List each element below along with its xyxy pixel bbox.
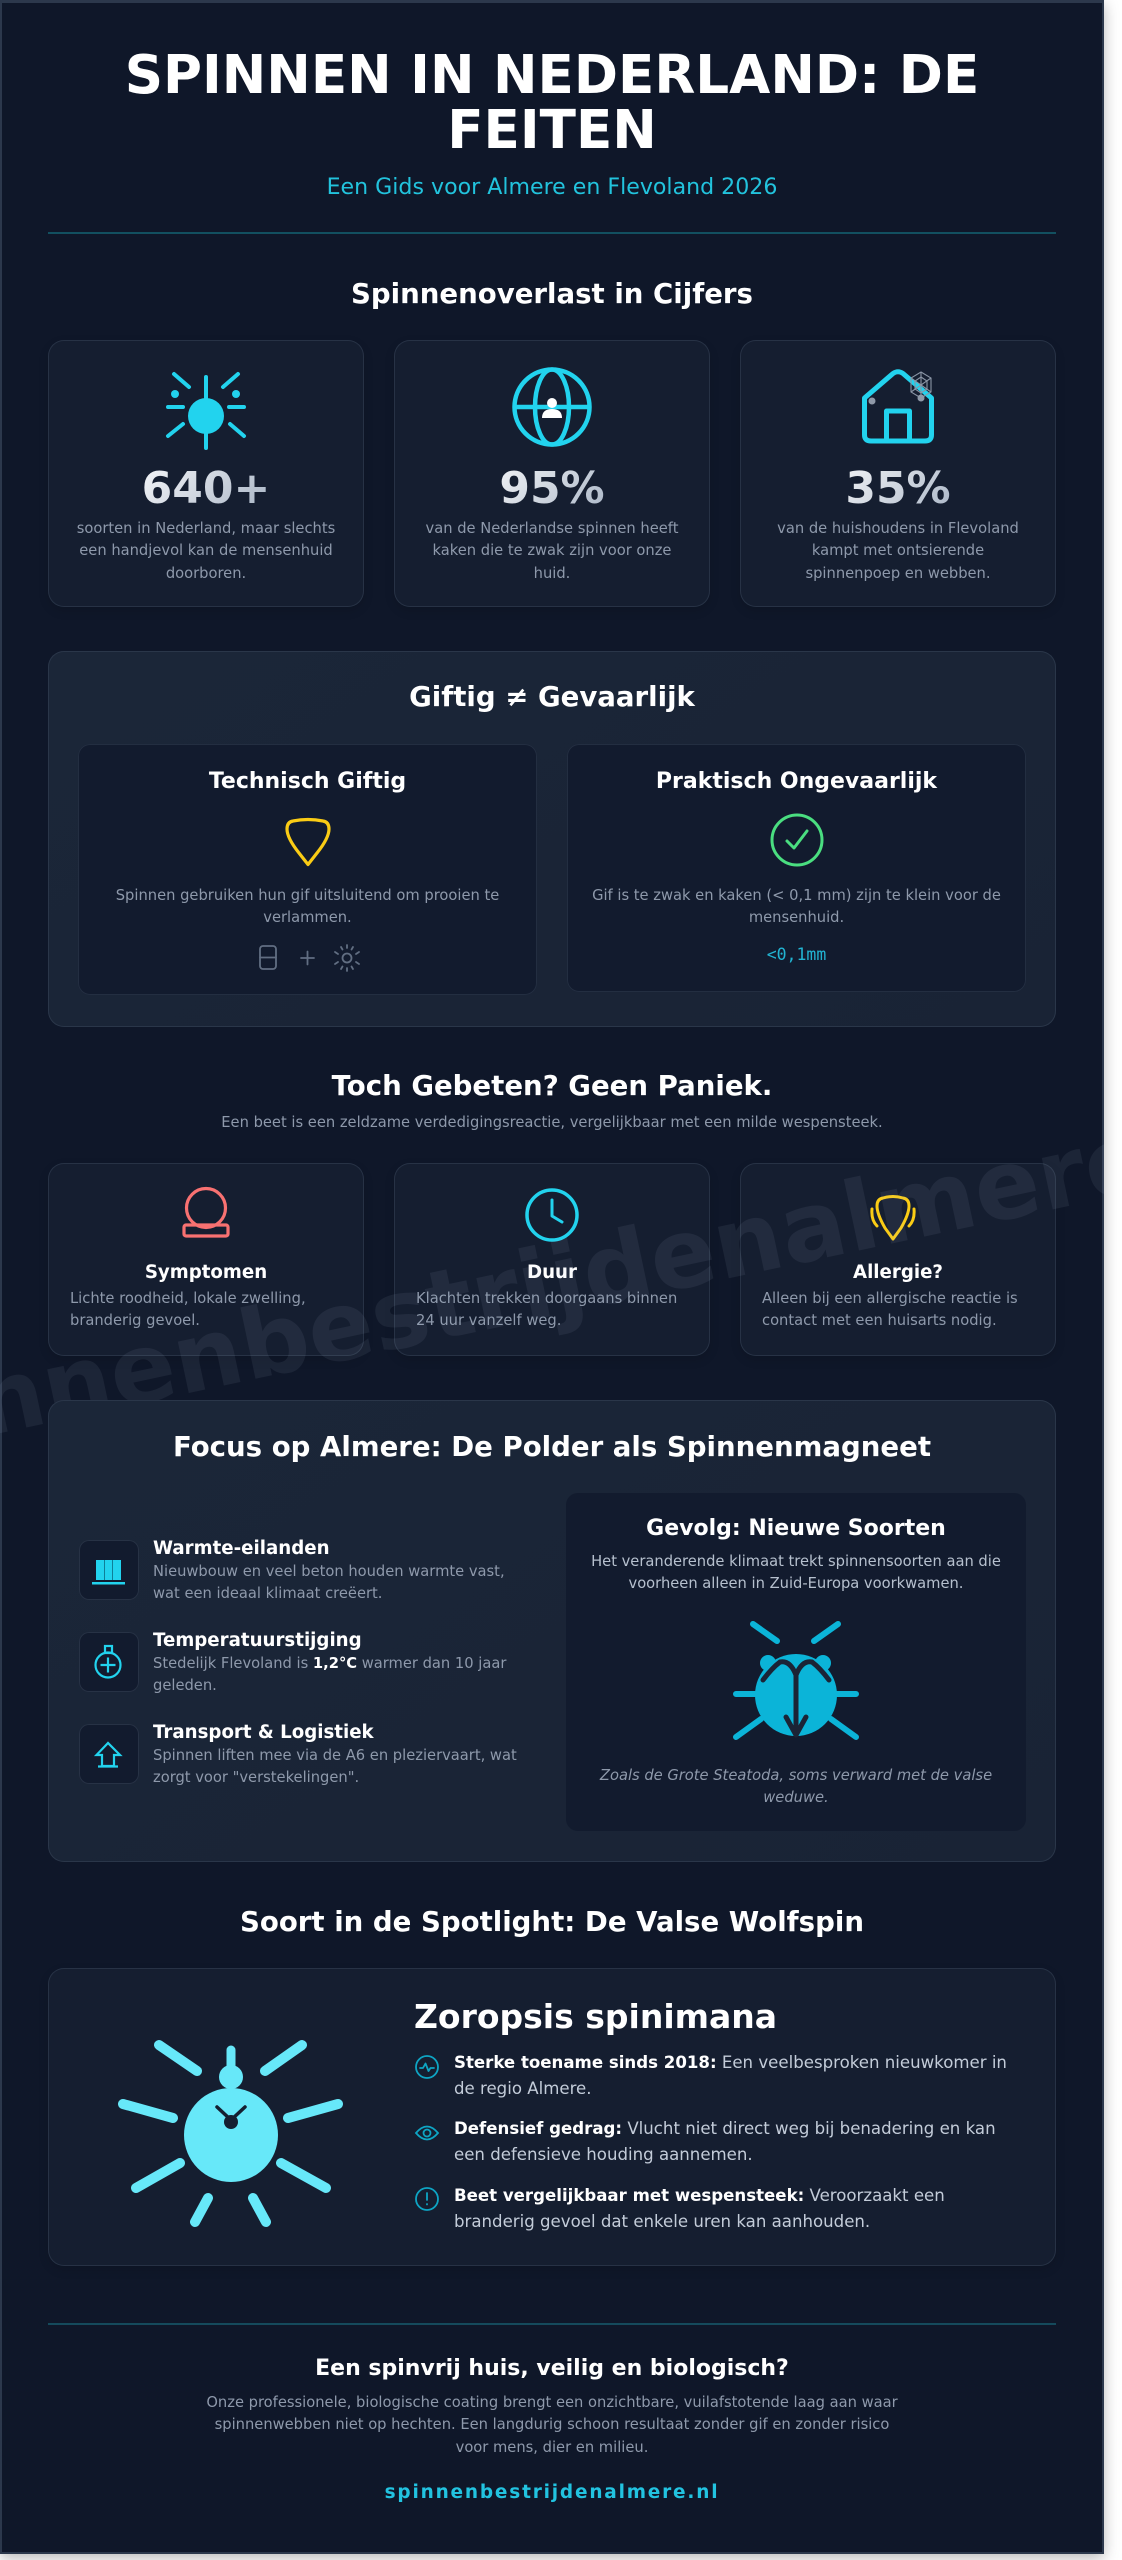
factor: temperatuurstijging bbox=[79, 1630, 506, 1694]
description: kaken die te zwak zijn voor onze bbox=[432, 542, 671, 559]
caption: Zoals de Grote Steatoda, soms verward met de valse bbox=[600, 1767, 992, 1784]
panel: focus op almere bbox=[48, 1400, 1056, 1862]
factor text bbox=[153, 1747, 517, 1786]
description: van de huishoudens in Flevoland bbox=[777, 520, 1019, 537]
description: contact met een huisarts nodig. bbox=[762, 1312, 997, 1329]
description: Spinnen gebruiken hun gif uitsluitend om prooien te bbox=[116, 887, 499, 904]
description bbox=[70, 1290, 306, 1329]
factor title: Warmte-eilanden bbox=[153, 1538, 330, 1559]
icon: building bbox=[79, 1540, 139, 1600]
icon: thermometer bbox=[79, 1632, 139, 1692]
icon: check circle bbox=[770, 814, 824, 866]
number: 35% bbox=[845, 463, 951, 514]
footer divider bbox=[48, 2323, 1056, 2325]
factor text: Spinnen liften mee via de A6 en pleziervaart, wat bbox=[153, 1747, 517, 1764]
icon: shield bbox=[285, 818, 331, 866]
caption bbox=[600, 1767, 992, 1806]
description: huid. bbox=[534, 565, 570, 582]
description: doorboren. bbox=[166, 565, 246, 582]
icon: globe with person bbox=[512, 367, 592, 447]
footer text: voor mens, dier en milieu. bbox=[456, 2439, 648, 2456]
factor text: wat een ideaal klimaat creëert. bbox=[153, 1585, 382, 1602]
fact: beet vergelijkbaar: branderig gevoel dat enkele uren kan aanhouden. bbox=[454, 2212, 870, 2231]
description bbox=[77, 520, 335, 582]
header divider bbox=[48, 232, 1056, 234]
icon: spider bbox=[166, 372, 246, 450]
number bbox=[740, 461, 1056, 517]
heading: toch gebeten: Toch Gebeten? Geen Paniek. bbox=[332, 1069, 772, 1102]
number: 95% bbox=[499, 463, 605, 514]
icon: eye bbox=[414, 2126, 440, 2140]
description bbox=[762, 1290, 1018, 1329]
fact: sterke toename: Sterke toename sinds 2018: Een veelbesproken nieuwkomer in bbox=[454, 2053, 1007, 2072]
description: Klachten trekken doorgaans binnen bbox=[416, 1290, 677, 1307]
footer text bbox=[206, 2394, 898, 2456]
fact: beet vergelijkbaar bbox=[415, 2186, 945, 2231]
caption: weduwe. bbox=[763, 1789, 829, 1806]
icon: alert bbox=[415, 2187, 439, 2211]
footer heading: Een spinvrij huis, veilig en biologisch? bbox=[315, 2356, 789, 2381]
fact: sterke toename: de regio Almere. bbox=[454, 2079, 592, 2098]
stat card: 95% bbox=[394, 340, 710, 607]
description: kampt met ontsierende bbox=[812, 542, 984, 559]
intro text: Een beet is een zeldzame verdedigingsreactie, vergelijkbaar met een milde wespensteek. bbox=[221, 1114, 883, 1131]
website link: spinnenbestrijdenalmere.nl bbox=[385, 2482, 719, 2503]
heading: soort in de spotlight: Soort in de Spotlight: De Valse Wolfspin bbox=[240, 1905, 864, 1938]
icon: swollen bite bbox=[182, 1186, 230, 1238]
fact: beet vergelijkbaar: Beet vergelijkbaar met wespensteek: Veroorzaakt een bbox=[454, 2186, 945, 2205]
measurement label: <0,1mm bbox=[767, 945, 826, 964]
description bbox=[777, 520, 1019, 582]
card: duur bbox=[394, 1163, 710, 1356]
description: voorheen alleen in Zuid-Europa voorkwamen. bbox=[628, 1575, 963, 1592]
factor title: Temperatuurstijging bbox=[153, 1630, 362, 1651]
stat card: 35% bbox=[740, 340, 1056, 607]
description bbox=[426, 520, 678, 582]
footer text: spinnenwebben niet op hechten. Een langdurig schoon resultaat zonder gif en zonder risico bbox=[215, 2416, 889, 2433]
card title: Gevolg: Nieuwe Soorten bbox=[646, 1516, 946, 1541]
description: soorten in Nederland, maar slechts bbox=[77, 520, 335, 537]
description: Alleen bij een allergische reactie is bbox=[762, 1290, 1018, 1307]
fact: sterke toename bbox=[415, 2053, 1007, 2098]
panel heading: Giftig ≠ Gevaarlijk bbox=[409, 680, 695, 713]
icon: house with web bbox=[862, 369, 934, 444]
card title: Technisch Giftig bbox=[209, 769, 406, 794]
illustration: false wolf spider bbox=[118, 2040, 343, 2227]
card title: Praktisch Ongevaarlijk bbox=[656, 769, 937, 794]
factor text: Nieuwbouw en veel beton houden warmte vast, bbox=[153, 1563, 505, 1580]
title: FEITEN bbox=[447, 99, 657, 161]
card title: Symptomen bbox=[145, 1262, 267, 1283]
factor: warmte-eilanden bbox=[79, 1538, 505, 1602]
species name: Zoropsis spinimana bbox=[414, 1997, 777, 2036]
description bbox=[591, 1553, 1001, 1592]
description bbox=[592, 887, 1001, 926]
factor: transport en logistiek bbox=[79, 1722, 517, 1786]
subtitle: Een Gids voor Almere en Flevoland 2026 bbox=[327, 174, 777, 200]
panel heading: Focus op Almere: De Polder als Spinnenmagneet bbox=[173, 1430, 931, 1463]
card: nieuwe soorten bbox=[566, 1493, 1026, 1831]
stat card: 640+ bbox=[48, 340, 364, 607]
icon: clock bbox=[525, 1188, 579, 1242]
fact: defensief gedrag: een defensieve houding aannemen. bbox=[454, 2145, 753, 2164]
factor text bbox=[153, 1655, 506, 1694]
number: 640+ bbox=[142, 463, 270, 514]
panel: zoropsis spinimana bbox=[48, 1968, 1056, 2266]
factor text: zorgt voor "verstekelingen". bbox=[153, 1769, 359, 1786]
fact: defensief gedrag bbox=[414, 2119, 996, 2164]
factor text: Stedelijk Flevoland is 1,2°C warmer dan 10 jaar bbox=[153, 1655, 506, 1672]
description: verlammen. bbox=[263, 909, 352, 926]
card title: Allergie? bbox=[853, 1262, 943, 1283]
card: symptomen bbox=[48, 1163, 364, 1356]
description bbox=[116, 887, 499, 926]
number bbox=[394, 461, 710, 517]
number bbox=[48, 461, 364, 517]
description: mensenhuid. bbox=[749, 909, 844, 926]
card: praktisch ongevaarlijk bbox=[567, 744, 1026, 992]
description: 24 uur vanzelf weg. bbox=[416, 1312, 561, 1329]
footer text: Onze professionele, biologische coating brengt een onzichtbare, vuilafstotende laag aan waar bbox=[206, 2394, 898, 2411]
description: een handjevol kan de mensenhuid bbox=[79, 542, 333, 559]
icon: pulse bbox=[415, 2055, 439, 2079]
icon: upward arrow bbox=[79, 1724, 139, 1784]
factor text bbox=[153, 1563, 505, 1602]
icons: gland plus sun bbox=[259, 944, 360, 972]
factor text: geleden. bbox=[153, 1677, 217, 1694]
title: SPINNEN IN NEDERLAND: DE bbox=[125, 44, 979, 106]
description: branderig gevoel. bbox=[70, 1312, 200, 1329]
description: Het veranderende klimaat trekt spinnensoorten aan die bbox=[591, 1553, 1001, 1570]
description: spinnenpoep en webben. bbox=[805, 565, 991, 582]
fact: defensief gedrag: Defensief gedrag: Vlucht niet direct weg bij benadering en kan bbox=[454, 2119, 996, 2138]
card: technisch giftig bbox=[78, 744, 537, 995]
heading: spinnenoverlast in cijfers: Spinnenoverlast in Cijfers bbox=[351, 277, 753, 310]
description: Gif is te zwak en kaken (< 0,1 mm) zijn te klein voor de bbox=[592, 887, 1001, 904]
icon: shield with alert bbox=[870, 1195, 916, 1241]
title bbox=[125, 44, 979, 161]
card: allergie bbox=[740, 1163, 1056, 1356]
description: Lichte roodheid, lokale zwelling, bbox=[70, 1290, 306, 1307]
panel: giftig vs gevaarlijk bbox=[48, 651, 1056, 1027]
card title: Duur bbox=[527, 1262, 577, 1283]
factor title: Transport & Logistiek bbox=[153, 1722, 374, 1743]
description: van de Nederlandse spinnen heeft bbox=[426, 520, 678, 537]
icon: steatoda spider bbox=[733, 1621, 859, 1740]
description bbox=[416, 1290, 677, 1329]
